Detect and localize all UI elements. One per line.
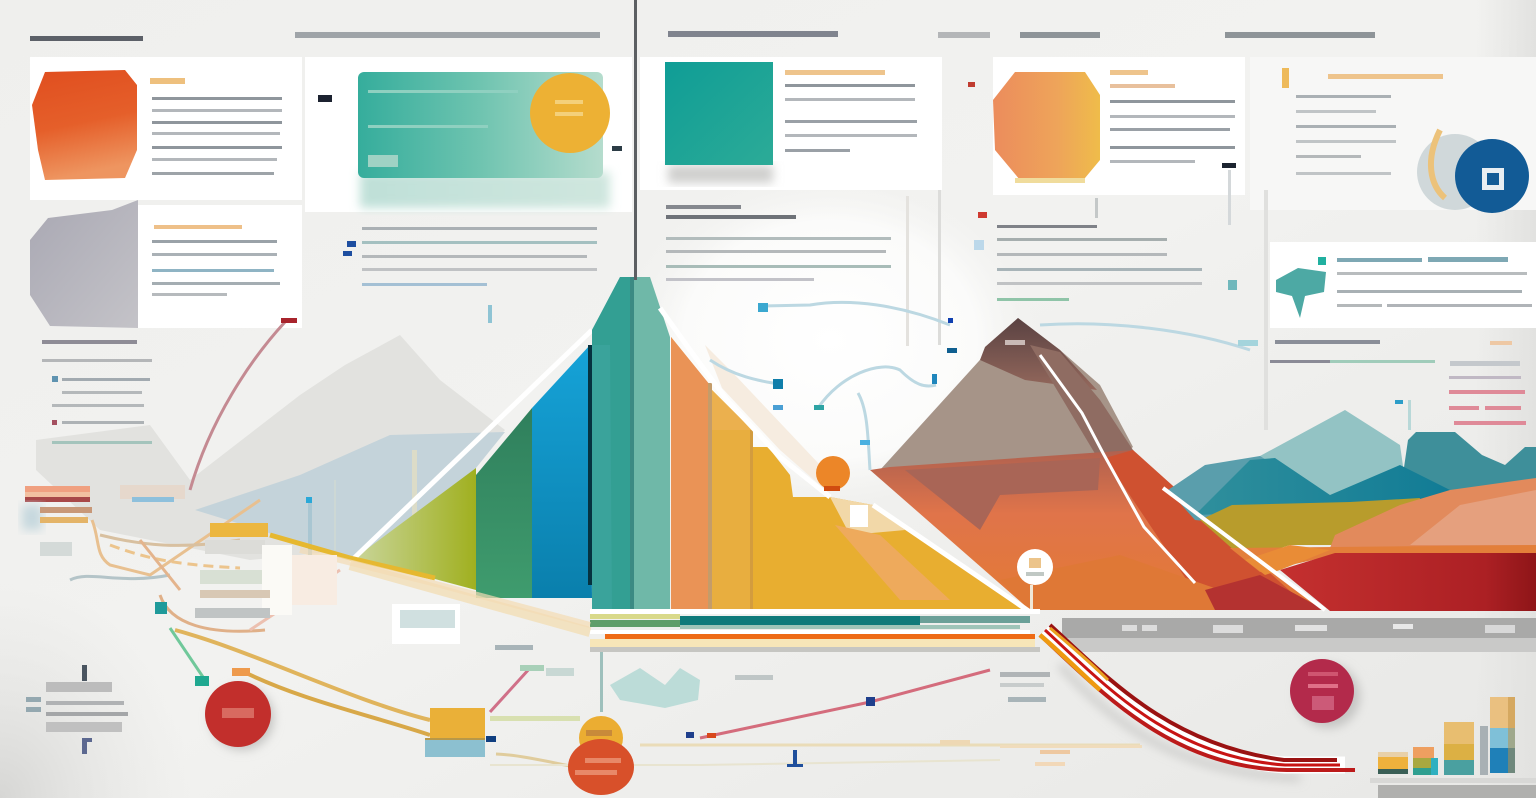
brown mountain [870,318,1325,612]
gray timeline band [1062,618,1536,652]
stacked orange and yellow circles [568,716,634,795]
pale teal cloud [520,665,773,708]
panel: blue icon note [1222,57,1536,225]
panel: teal callout [305,57,632,212]
crimson circle badge [1290,659,1360,728]
panel: orange note [30,57,302,200]
bottom center connector lines [490,668,1140,767]
text block center [666,190,941,346]
text block under peach note [968,82,1202,301]
white node cards [155,523,533,650]
mini bar chart [1370,697,1536,798]
amber node [425,708,580,757]
yellow circle [530,73,610,153]
blue circle icon [1417,130,1529,213]
horizontal stripes under chart [590,609,1040,712]
small connector nodes [1228,280,1258,346]
text block below teal callout [343,227,597,323]
callout pin [1017,549,1053,610]
tangled network lines [70,500,590,735]
peach blob [993,72,1100,180]
red circle node [195,668,274,750]
gray blob [30,200,138,328]
teal tree icon [1276,268,1326,318]
central chart: falling orange and yellow bars [660,308,1030,612]
right side list [1264,190,1526,430]
legend bottom left [26,665,128,754]
curved ribbons [1040,625,1355,778]
left side list [42,340,152,444]
network of blue connectors [710,302,1250,470]
panel: gray note [30,200,302,328]
header bars [30,31,1375,41]
connector line red [190,318,297,490]
pale mountains left [36,335,505,560]
panel: wide white note [1270,242,1536,328]
text labels bottom center [940,672,1142,766]
central vertical divider [612,0,660,280]
central chart: teal prism [592,277,670,610]
orange marker [816,456,868,527]
right layered mountains [1163,400,1536,611]
left node cards [22,485,185,556]
panel: teal square note [640,57,942,190]
panel: peach note [993,57,1245,195]
central chart: left rising bars [350,330,594,598]
orange blob [32,70,137,180]
